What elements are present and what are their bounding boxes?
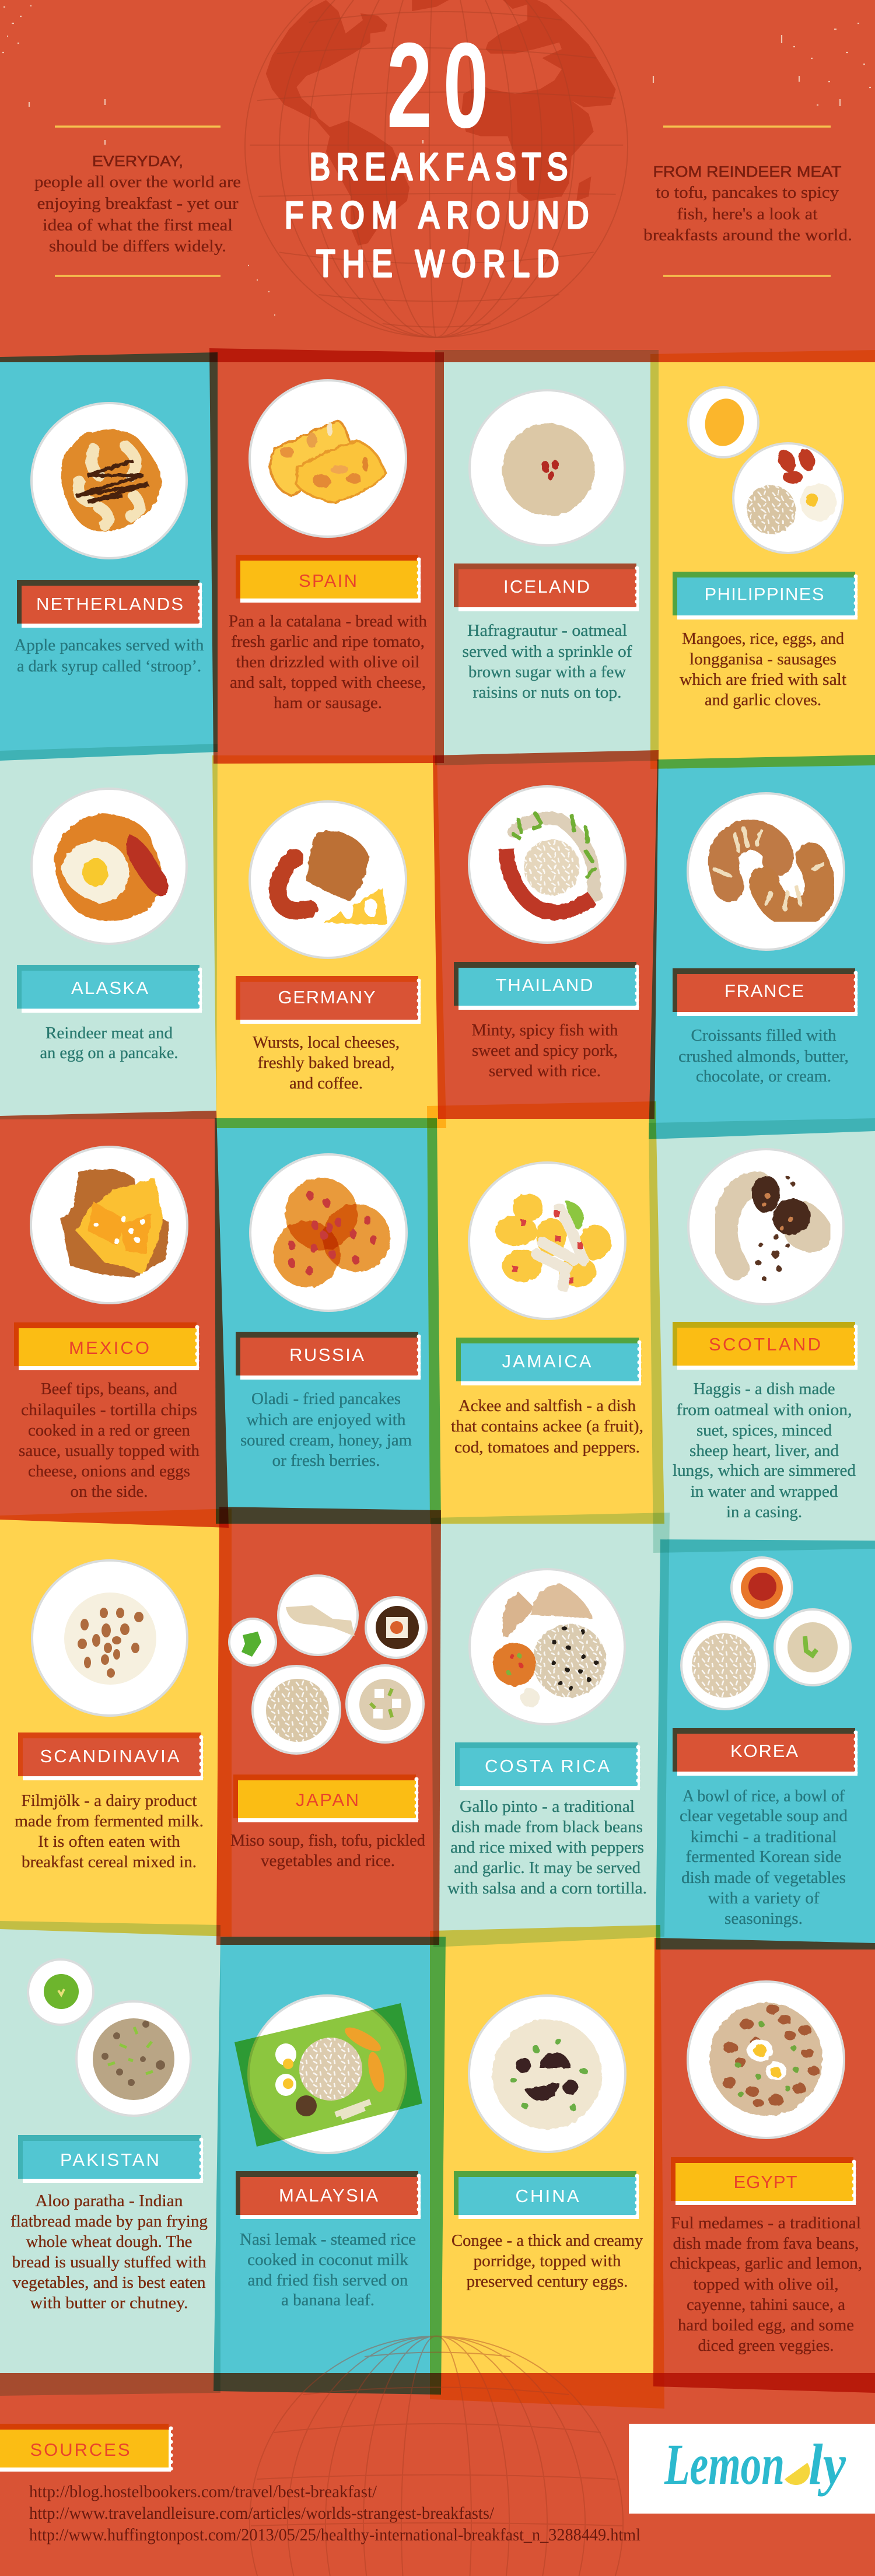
panel: Thailand background: [433, 750, 659, 1119]
card: Jamaica: [451, 1163, 643, 1457]
text: Scotland description: lungs, which are simmered: [673, 1461, 856, 1480]
text: Costa Rica description: [447, 1797, 647, 1898]
text: Iceland description: [462, 621, 632, 702]
label: THAILAND: [454, 962, 639, 1010]
text: Scotland description: in water and wrapped: [691, 1482, 838, 1501]
label: SCANDINAVIA: [18, 1732, 203, 1780]
label: COSTA RICA: [455, 1742, 640, 1790]
label: MEXICO: MEXICO: [69, 1338, 149, 1358]
text: Pakistan description: with butter or chutney.: [30, 2294, 188, 2312]
panel: footer background: [0, 2373, 875, 2576]
label: PAKISTAN: [18, 2135, 203, 2183]
label: MEXICO: [14, 1322, 199, 1370]
icon: rice, soup and kimchi bowls: [681, 1558, 850, 1709]
title: 2: [387, 18, 432, 153]
text: Pakistan description: [10, 2192, 208, 2312]
text: China description: porridge, topped with: [474, 2252, 621, 2270]
text: Philippines description: longganisa - sausages: [690, 650, 836, 668]
text: Jamaica description: cod, tomatoes and peppers.: [454, 1438, 640, 1457]
label: CHINA: CHINA: [516, 2186, 579, 2206]
text: Scandinavia description: made from fermented milk.: [15, 1812, 204, 1831]
text: China description: [452, 2231, 643, 2291]
label: RUSSIA: RUSSIA: [289, 1345, 364, 1365]
text block: intro left: should be differs widely.: [49, 237, 226, 256]
label: SCOTLAND: [673, 1322, 858, 1370]
text: China description: preserved century eggs.: [467, 2272, 628, 2291]
text: Malaysia description: and fried fish served on: [247, 2271, 408, 2290]
text: Korea description: [680, 1787, 848, 1928]
text block: intro right: breakfasts around the world.: [643, 226, 852, 244]
text: Spain description: then drizzled with olive oil: [236, 653, 420, 671]
text: Scotland description: from oatmeal with onion,: [677, 1401, 852, 1419]
text: Mexico description: on the side.: [70, 1482, 148, 1501]
text: Spain description: [229, 612, 427, 712]
text: Korea description: dish made of vegetables: [681, 1868, 846, 1887]
card: Korea: [673, 1558, 858, 1928]
label: ALASKA: [17, 965, 202, 1013]
text: Spain description: ham or sausage.: [274, 694, 382, 712]
label: JAMAICA: [456, 1338, 641, 1385]
text: France description: Croissants filled with: [691, 1026, 836, 1045]
panel: Mexico background: [0, 1111, 229, 1528]
label: SOURCES: SOURCES: [30, 2440, 130, 2460]
label: MALAYSIA: MALAYSIA: [279, 2185, 378, 2206]
text: Thailand description: [471, 1021, 618, 1080]
text: Korea description: A bowl of rice, a bowl of: [682, 1787, 845, 1805]
label: FRANCE: [673, 968, 858, 1016]
card: Russia: [236, 1154, 421, 1470]
text: Alaska description: [40, 1024, 178, 1062]
panel: China background: [430, 1925, 664, 2409]
icon: congee plate: [469, 1996, 625, 2152]
globe: footer grid: [250, 2336, 623, 2576]
text: Philippines description: [680, 629, 846, 709]
text: Thailand description: served with rice.: [489, 1062, 601, 1080]
text: Russia description: or fresh berries.: [272, 1451, 380, 1470]
text: Korea description: fermented Korean side: [686, 1847, 841, 1866]
label: RUSSIA: [236, 1332, 421, 1380]
text: Mexico description: cooked in a red or green: [28, 1421, 190, 1440]
text block: intro left: idea of what the first meal: [43, 216, 233, 235]
text: Egypt description: hard boiled egg, and some: [678, 2316, 854, 2334]
text: Japan description: vegetables and rice.: [261, 1852, 395, 1870]
label: GERMANY: [236, 976, 421, 1024]
text: Costa Rica description: dish made from black beans: [452, 1818, 643, 1836]
panel: Scandinavia background: [0, 1508, 232, 1937]
icon: filmjolk bowl: [32, 1560, 187, 1716]
label: FRANCE: FRANCE: [724, 981, 804, 1001]
text: Mexico description: Beef tips, beans, and: [41, 1380, 177, 1398]
text: Malaysia description: Nasi lemak - steamed rice: [240, 2230, 416, 2249]
panel: Alaska background: [0, 744, 218, 1119]
text block: intro right: FROM REINDEER MEAT: [653, 163, 842, 180]
text: Germany description: [253, 1033, 400, 1093]
text: Jamaica description: [451, 1396, 643, 1457]
text: Netherlands description: [14, 636, 204, 676]
text: Costa Rica description: and rice mixed with peppers: [450, 1838, 644, 1857]
card: Mexico: [14, 1147, 200, 1501]
label: ICELAND: ICELAND: [503, 576, 590, 597]
text: Mexico description: cheese, onions and eggs: [28, 1462, 190, 1480]
text: Alaska description: an egg on a pancake.: [40, 1044, 178, 1062]
text: Korea description: with a variety of: [708, 1889, 820, 1908]
panel: Russia background: [215, 1118, 441, 1524]
label: KOREA: KOREA: [730, 1741, 798, 1761]
text: Costa Rica description: and garlic. It may be served: [454, 1859, 640, 1877]
card: Thailand: [454, 786, 639, 1080]
text: Spain description: fresh garlic and ripe tomato,: [231, 632, 425, 651]
card: Costa Rica: [447, 1569, 647, 1898]
title: THE WORLD: [316, 242, 559, 285]
text: Malaysia description: a banana leaf.: [281, 2291, 374, 2309]
text: Pakistan description: Aloo paratha - Indian: [35, 2192, 183, 2210]
text: Philippines description: and garlic cloves.: [705, 691, 821, 709]
panel: Pakistan background: [0, 1921, 220, 2396]
text: Egypt description: cayenne, tahini sauce, a: [687, 2295, 845, 2314]
label: SCOTLAND: SCOTLAND: [709, 1334, 821, 1354]
text block: intro right: [643, 163, 852, 244]
label: SPAIN: SPAIN: [299, 570, 357, 591]
text: Mexico description: [19, 1380, 200, 1501]
text: Pakistan description: bread is usually stuffed with: [12, 2253, 206, 2272]
text: source links: [29, 2482, 640, 2544]
text: Netherlands description: a dark syrup called ‘stroop’.: [17, 657, 201, 676]
text: Scandinavia description: [15, 1791, 204, 1871]
text: France description: chocolate, or cream.: [696, 1067, 831, 1086]
card: Japan: [229, 1576, 426, 1870]
text: Egypt description: chickpeas, garlic and lemon,: [670, 2254, 862, 2273]
text block: intro right: to tofu, pancakes to spicy: [656, 183, 839, 202]
title: [285, 18, 589, 285]
text: Philippines description: Mangoes, rice, eggs, and: [682, 629, 844, 648]
text: Egypt description: diced green veggies.: [698, 2336, 834, 2355]
logo: Lemonly: ly: [808, 2432, 846, 2497]
panel: Germany background: [212, 755, 446, 1128]
card: China: [452, 1996, 643, 2291]
text: Scotland description: suet, spices, minced: [696, 1421, 832, 1440]
text: Costa Rica description: Gallo pinto - a traditional: [460, 1797, 635, 1816]
text: Malaysia description: [240, 2230, 416, 2309]
text: Russia description: Oladi - fried pancakes: [251, 1390, 401, 1408]
text: Scandinavia description: Filmjölk - a dairy product: [21, 1791, 197, 1810]
text: Korea description: kimchi - a traditional: [691, 1828, 836, 1846]
label: MALAYSIA: [236, 2171, 421, 2219]
text block: intro left: [34, 152, 241, 256]
icon: apple pancake plate: [32, 403, 187, 558]
label: EGYPT: [671, 2157, 856, 2205]
panel: Philippines background: [650, 350, 875, 769]
text: source links: http://www.huffingtonpost.com/2013/05/25/healthy-international-breakfast_n_3288449.html: [29, 2525, 640, 2544]
text: Egypt description: [670, 2214, 862, 2355]
globe: header illustration: [245, 0, 628, 337]
panel: Korea background: [656, 1539, 875, 1950]
text: Malaysia description: cooked in coconut milk: [247, 2250, 408, 2269]
text: Japan description: [230, 1831, 425, 1870]
text: Iceland description: served with a sprinkle of: [462, 642, 632, 661]
panel: Malaysia background: [214, 1937, 446, 2395]
label: EGYPT: EGYPT: [734, 2172, 797, 2192]
logo: Lemonly: Lemon: [664, 2432, 785, 2497]
text: Mexico description: sauce, usually topped with: [19, 1441, 200, 1460]
card: Pakistan: [10, 1959, 208, 2312]
text: Egypt description: topped with olive oil,: [693, 2275, 839, 2294]
card: Alaska: [17, 789, 202, 1062]
text: Scotland description: in a casing.: [726, 1503, 802, 1521]
label: PHILIPPINES: PHILIPPINES: [705, 584, 824, 604]
icon: wurst, bread and cheese plate: [250, 802, 406, 958]
text: Japan description: Miso soup, fish, tofu, pickled: [230, 1831, 425, 1850]
text: Egypt description: dish made from fava beans,: [673, 2234, 859, 2253]
icon: chilaquiles plate: [31, 1147, 187, 1303]
text: Thailand description: Minty, spicy fish with: [471, 1021, 618, 1040]
icon: gallo pinto plate: [470, 1569, 625, 1724]
label: NETHERLANDS: [17, 580, 202, 628]
icon: ackee and saltfish plate: [469, 1163, 625, 1319]
label: SCANDINAVIA: SCANDINAVIA: [40, 1746, 180, 1766]
panel: Spain background: [209, 348, 444, 764]
text: Scandinavia description: It is often eaten with: [38, 1832, 181, 1851]
icon: nasi lemak on banana leaf: [235, 1996, 422, 2153]
card: Germany: [236, 802, 421, 1093]
text: Alaska description: Reindeer meat and: [46, 1024, 173, 1042]
text: Egypt description: Ful medames - a traditional: [671, 2214, 861, 2232]
card: Scandinavia: [15, 1560, 204, 1871]
text: source links: http://blog.hostelbookers.com/travel/best-breakfast/: [29, 2482, 377, 2501]
icon: spicy fish and pork plate: [469, 786, 625, 943]
card: Netherlands: [14, 403, 204, 676]
label: NETHERLANDS: NETHERLANDS: [36, 594, 183, 614]
card: Egypt: [670, 1982, 862, 2355]
panel: Costa Rica background: [431, 1513, 670, 1947]
label: SOURCES: [0, 2424, 171, 2472]
label: CHINA: [454, 2171, 639, 2219]
text: China description: Congee - a thick and creamy: [452, 2231, 643, 2250]
text: Thailand description: sweet and spicy pork,: [472, 1041, 618, 1060]
label: GERMANY: GERMANY: [278, 987, 376, 1007]
text: Costa Rica description: with salsa and a corn tortilla.: [447, 1879, 647, 1898]
title: BREAKFASTS: [310, 145, 568, 188]
label: JAPAN: [233, 1774, 418, 1822]
text: Philippines description: which are fried with salt: [680, 670, 846, 689]
card: France: [673, 793, 858, 1086]
panel: France background: [649, 755, 875, 1139]
text: Korea description: clear vegetable soup and: [680, 1807, 848, 1825]
icon: haggis plate: [688, 1149, 844, 1304]
text block: intro right: fish, here's a look at: [677, 205, 818, 223]
text: Jamaica description: Ackee and saltfish - a dish: [459, 1396, 636, 1415]
logo: Lemonly: [629, 2424, 875, 2514]
text: France description: crushed almonds, butter,: [678, 1047, 849, 1066]
label: ALASKA: ALASKA: [71, 978, 148, 998]
texture: header speckles: [2, 6, 871, 315]
card: Iceland: [454, 390, 639, 702]
text: Spain description: and salt, topped with cheese,: [230, 673, 426, 692]
text: France description: [678, 1026, 849, 1086]
panel: Scotland background: [649, 1118, 875, 1553]
text: Netherlands description: Apple pancakes served with: [14, 636, 204, 654]
text block: intro left: enjoying breakfast - yet our: [37, 194, 239, 213]
title: 0: [443, 18, 489, 153]
label: THAILAND: THAILAND: [496, 975, 593, 995]
title: FROM AROUND: [285, 194, 589, 236]
icon: pan a la catalana plate: [250, 380, 406, 537]
text: Pakistan description: whole wheat dough. The: [26, 2232, 192, 2251]
text: Russia description: [240, 1390, 412, 1470]
label: ICELAND: [454, 564, 639, 611]
label: JAMAICA: JAMAICA: [502, 1351, 592, 1371]
text: Germany description: freshly baked bread,: [258, 1054, 394, 1072]
icon: oatmeal plate: [470, 390, 625, 545]
icon: croissants plate: [688, 793, 844, 950]
panel: header background: [0, 0, 875, 362]
text: Spain description: Pan a la catalana - bread with: [229, 612, 427, 631]
text: Russia description: which are enjoyed with: [246, 1410, 406, 1429]
label: SPAIN: [236, 555, 421, 603]
text: Iceland description: raisins or nuts on top.: [473, 683, 622, 702]
icon: reindeer meat and egg pancake plate: [32, 789, 187, 944]
text: Korea description: seasonings.: [724, 1909, 803, 1928]
text block: intro left: people all over the world are: [34, 173, 241, 191]
text: Scandinavia description: breakfast cereal mixed in.: [22, 1853, 197, 1871]
icon: five dishes: [229, 1576, 426, 1754]
label: KOREA: [673, 1728, 858, 1776]
text: Scotland description: Haggis - a dish made: [693, 1380, 835, 1398]
icon: oladi pancakes plate: [250, 1154, 407, 1311]
text: Scotland description: sheep heart, liver, and: [690, 1441, 839, 1460]
text: Pakistan description: vegetables, and is best eaten: [13, 2273, 206, 2292]
card: Spain: [229, 380, 427, 712]
text: Iceland description: Hafragrautur - oatmeal: [467, 621, 627, 640]
text: Scotland description: [673, 1380, 856, 1521]
panel: Egypt background: [653, 1938, 875, 2393]
label: JAPAN: JAPAN: [296, 1790, 359, 1810]
decorative rules: intro left and right: [55, 127, 831, 276]
text: Pakistan description: flatbread made by pan frying: [10, 2212, 208, 2231]
text: Germany description: and coffee.: [289, 1074, 363, 1093]
label: COSTA RICA: COSTA RICA: [485, 1756, 610, 1776]
card: Scotland: [673, 1149, 858, 1521]
label: PHILIPPINES: [673, 572, 858, 620]
text block: intro left: EVERYDAY,: [92, 152, 183, 170]
text: source links: http://www.travelandleisure.com/articles/worlds-strangest-breakfasts/: [29, 2504, 495, 2523]
text: Germany description: Wursts, local cheeses,: [253, 1033, 400, 1052]
icon: ful medames plate: [688, 1982, 844, 2138]
card: Philippines: [673, 387, 858, 709]
panel: Japan background: [216, 1507, 441, 1945]
panel: Jamaica background: [427, 1101, 664, 1524]
text: Jamaica description: that contains ackee (a fruit),: [451, 1417, 643, 1436]
panel: Iceland background: [435, 350, 659, 765]
panel: Netherlands background: [0, 352, 218, 761]
icon: mango plate and longganisa plate: [688, 387, 843, 553]
card: Malaysia: [235, 1996, 422, 2309]
text: Russia description: soured cream, honey, jam: [240, 1431, 412, 1450]
text: Iceland description: brown sugar with a few: [468, 663, 626, 681]
label: PAKISTAN: PAKISTAN: [60, 2150, 159, 2170]
text: Mexico description: chilaquiles - tortilla chips: [21, 1401, 197, 1419]
icon: aloo paratha and chutney: [28, 1959, 191, 2116]
